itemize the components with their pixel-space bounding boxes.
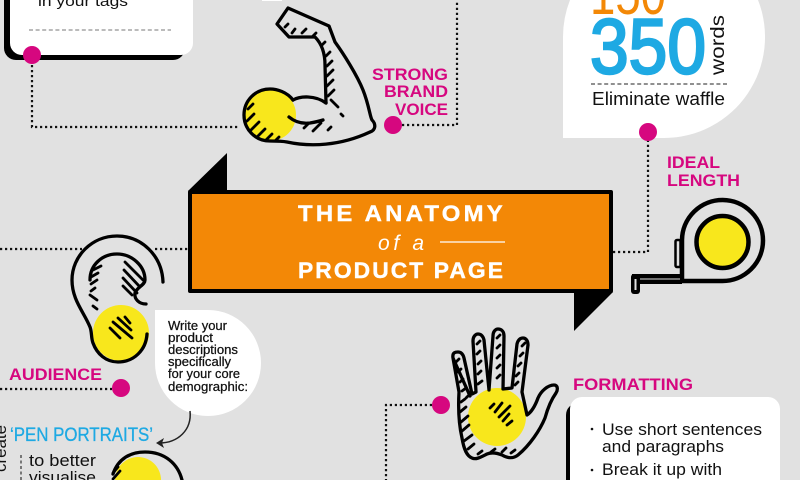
label: ideal length: LENGTH xyxy=(667,171,740,190)
dot: word count xyxy=(639,123,657,141)
label: strong brand voice: BRAND xyxy=(384,82,448,101)
label: ideal length: IDEAL xyxy=(667,153,720,172)
number: 350: 350 xyxy=(590,2,706,90)
bullet one: and paragraphs xyxy=(602,437,724,456)
bullet one: Use short sentences xyxy=(602,420,762,439)
title line two: of a xyxy=(378,232,424,255)
dot: brand voice xyxy=(384,116,402,134)
panel: formatting card xyxy=(566,397,780,480)
panel: tags card xyxy=(4,0,193,64)
label: ideal length xyxy=(667,153,740,190)
bubble text: descriptions xyxy=(168,343,238,357)
banner body xyxy=(190,192,611,291)
title line three: PRODUCT PAGE xyxy=(298,258,505,283)
connector: formatting xyxy=(386,405,432,480)
bubble text: for your core xyxy=(168,367,240,381)
title banner xyxy=(188,153,613,331)
card dot xyxy=(23,46,41,64)
dot: formatting xyxy=(432,396,450,414)
hand hatching xyxy=(456,335,525,454)
panel: ideal word count xyxy=(563,0,765,138)
title line one: THE ANATOMY xyxy=(298,201,506,226)
connector: tags card to arm xyxy=(32,65,240,127)
bubble text: product xyxy=(168,331,214,345)
icon: head xyxy=(113,452,182,480)
connector: audience xyxy=(0,388,112,390)
fragment of card above arm xyxy=(262,0,282,1)
connector: ideal length xyxy=(613,140,648,252)
bubble text: Write your xyxy=(168,319,227,333)
connector: brand voice xyxy=(402,0,457,125)
bubble text: specifically xyxy=(168,355,232,369)
icon: ear xyxy=(72,236,163,362)
text: to better visualise xyxy=(29,451,96,480)
banner fold bottom-right xyxy=(574,292,613,331)
unit: words: words xyxy=(708,15,729,76)
label: audience: AUDIENCE xyxy=(9,365,102,384)
label: formatting: FORMATTING xyxy=(573,375,693,394)
heading: pen portraits: ‘PEN PORTRAITS’ xyxy=(10,425,153,446)
bullet one xyxy=(591,420,762,456)
icon: flexed arm xyxy=(244,8,375,145)
label: strong brand voice: STRONG xyxy=(372,65,448,84)
icon: tape measure xyxy=(631,200,763,294)
connector: banner to ear xyxy=(0,248,188,250)
ear hatching xyxy=(90,262,143,309)
icon: hand xyxy=(453,329,557,459)
banner fold top-left xyxy=(188,153,227,191)
speech bubble: demographic xyxy=(155,310,261,416)
label: strong brand voice xyxy=(372,65,448,119)
dot: audience xyxy=(112,379,130,397)
label: strong brand voice: VOICE xyxy=(395,100,448,119)
caption: eliminate waffle: Eliminate waffle xyxy=(592,89,725,109)
arm hatching xyxy=(247,24,343,141)
bubble text: demographic: xyxy=(168,380,248,394)
arrow: bubble to pen portraits xyxy=(156,411,190,448)
bubble text xyxy=(168,319,248,394)
text: to better visualise: to better xyxy=(29,451,96,470)
bullet two: Break it up with xyxy=(602,460,722,479)
